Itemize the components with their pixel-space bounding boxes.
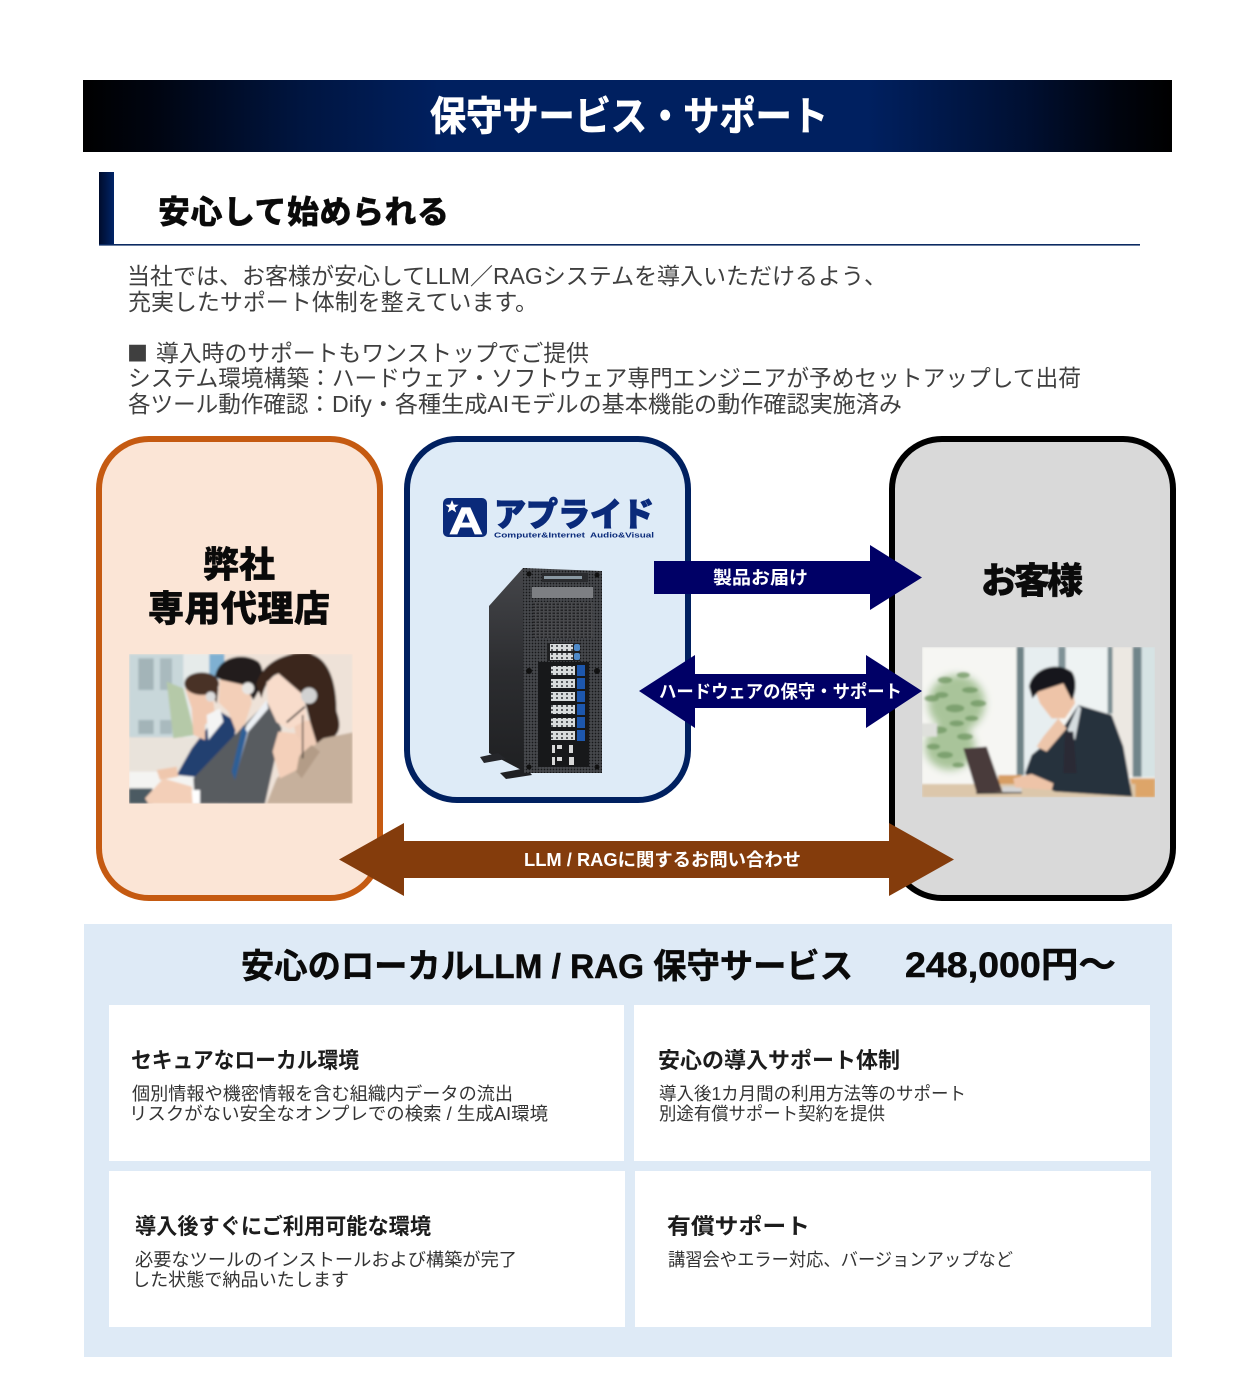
card: paid support: 有償サポート [667,1214,810,1239]
card: paid support: 講習会やエラー対応、バージョンアップなど [668,1250,1013,1270]
service title: 安心のローカルLLM / RAG 保守サービス [241,948,853,986]
logo: Applied [443,496,654,543]
card: secure local environment: リスクがない安全なオンプレでの検索 / 生成AI環境 [129,1104,548,1124]
title banner [83,80,1172,152]
arrow: inquiries [339,823,954,896]
card: secure local environment: セキュアなローカル環境 [131,1048,359,1073]
logo: Applied: A [449,501,483,543]
customer label: お客様 [981,560,1083,601]
arrow: product delivery [654,545,922,610]
card: onboarding support: 別途有償サポート契約を提供 [659,1104,885,1124]
card: onboarding support: 安心の導入サポート体制 [658,1048,900,1073]
logo: Applied: アプライド [494,496,654,533]
intro text block: 充実したサポート体制を整えています。 [128,289,538,315]
panel: maintenance service [84,924,1172,1357]
logo: Applied: Audio&Visual [590,530,654,540]
panel: dealer [99,439,380,898]
card: ready-to-use environment: 必要なツールのインストールおよび構築が完了 [135,1250,517,1270]
card: ready-to-use environment [109,1171,625,1327]
arrow: product delivery: 製品お届け [713,568,808,588]
dealer label [148,544,330,629]
arrow: hardware maintenance [639,655,922,728]
panel: customer [892,439,1173,898]
arrow: inquiries: LLM / RAGに関するお問い合わせ [524,850,801,870]
price: 248,000円〜 [905,946,1116,985]
card: ready-to-use environment: 導入後すぐにご利用可能な環境 [135,1214,431,1239]
server tower [480,568,602,779]
intro text block: 導入時のサポートもワンストップでご提供 [156,340,589,366]
logo: Applied: Computer&Internet [494,530,586,540]
intro text block: 当社では、お客様が安心してLLM／RAGシステムを導入いただけるよう、 [127,263,887,289]
card: secure local environment: 個別情報や機密情報を含む組織内データの流出 [132,1084,513,1104]
section heading [99,172,1140,246]
photo: businessman at laptop [922,647,1155,797]
section heading: 安心して始められる [158,194,449,230]
card: onboarding support: 導入後1カ月間の利用方法等のサポート [659,1084,966,1104]
photo: call centre operators [129,653,353,804]
arrow: hardware maintenance: ハードウェアの保守・サポート [659,681,902,702]
intro text block: システム環境構築：ハードウェア・ソフトウェア専門エンジニアが予めセットアップして出荷 [128,365,1081,391]
title banner: 保守サービス・サポート [430,95,828,139]
dealer label: 弊社 [203,544,275,585]
dealer label: 専用代理店 [148,588,330,629]
intro text block: ■ [127,338,148,368]
panel: Applied [407,439,688,800]
card: paid support [635,1171,1151,1327]
card: onboarding support [634,1005,1150,1161]
intro text block: Dify・各種生成AIモデルの基本機能の動作確認実施済み [332,391,902,417]
card: ready-to-use environment: した状態で納品いたします [132,1270,349,1290]
intro text block: 各ツール動作確認： [128,391,331,417]
intro text block [127,263,1081,417]
card: secure local environment [109,1005,624,1161]
